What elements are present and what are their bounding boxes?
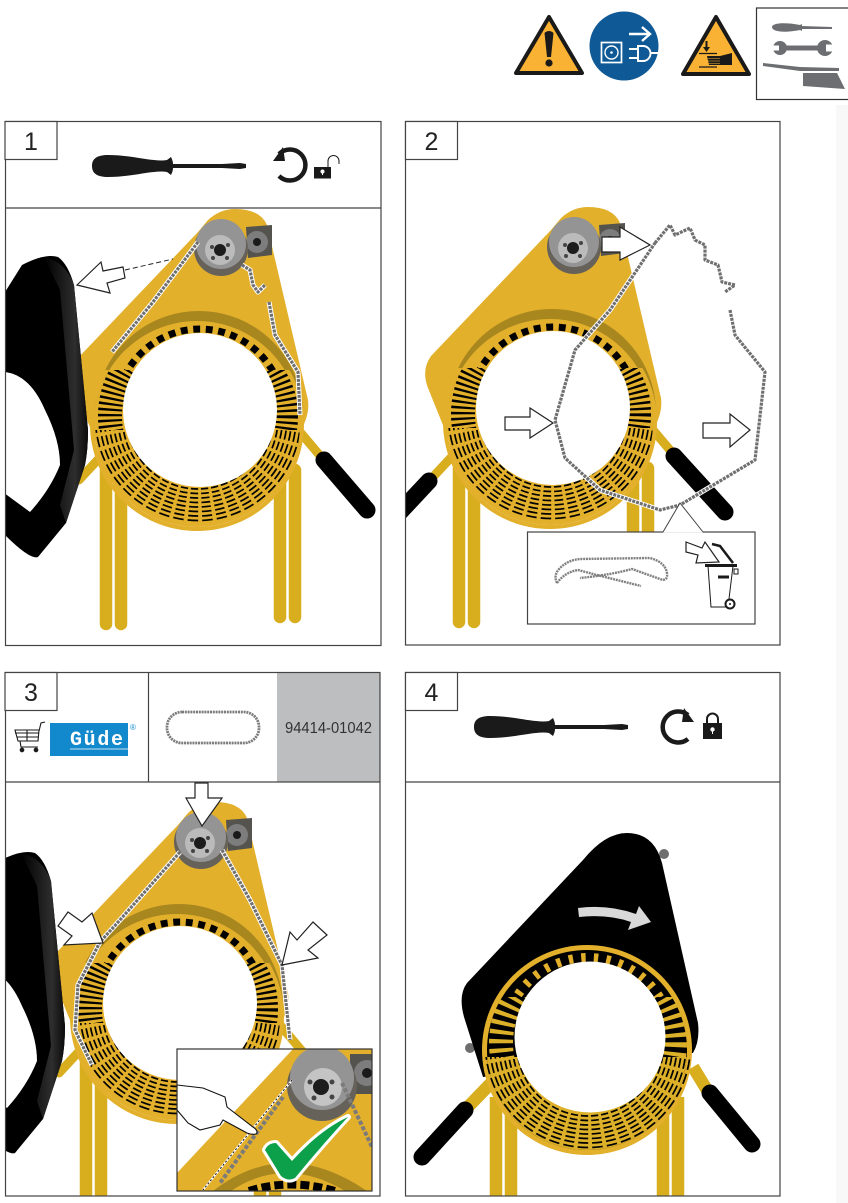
new chain	[75, 850, 290, 1065]
logo: Güde	[50, 723, 136, 756]
step number 3: 3	[24, 679, 38, 707]
inset drum arc	[213, 1163, 367, 1191]
arrow: into bin	[686, 542, 719, 563]
closed machine	[422, 833, 752, 1203]
icon: crush hazard triangle	[683, 17, 749, 74]
step number 4	[406, 672, 458, 710]
arrow: chain on left	[58, 912, 103, 945]
removed side cover	[0, 256, 88, 557]
header dividers	[6, 673, 380, 782]
part number: 94414-01042	[285, 720, 372, 737]
icon: shopping cart	[15, 722, 45, 752]
icon: screwdriver	[92, 155, 246, 177]
step number 4: 4	[425, 679, 439, 707]
side strip	[836, 105, 848, 1203]
arrow: chain on sprocket	[186, 783, 222, 826]
panel frame	[406, 122, 780, 645]
panel frame	[406, 672, 780, 1196]
inset green check mark	[265, 1117, 348, 1180]
black cover plate	[462, 833, 698, 1077]
step number 3	[5, 672, 57, 710]
inset pulley	[287, 1069, 357, 1121]
machine with old chain pulled away	[385, 207, 725, 622]
new chain loop	[167, 712, 259, 743]
icon: closed padlock	[703, 714, 722, 739]
drum	[482, 942, 692, 1155]
inset chain	[220, 1083, 372, 1183]
old chain loop	[555, 225, 765, 510]
dashed leader line	[125, 259, 173, 270]
legs and handle arms	[465, 1067, 707, 1203]
arrow: pull right	[703, 414, 750, 447]
icon: counter-clockwise rotation	[273, 147, 305, 180]
chain segments	[112, 242, 300, 415]
icon: general warning triangle	[516, 17, 582, 73]
panel: step 2	[385, 122, 780, 645]
handles	[385, 456, 725, 528]
arrow: pull left	[505, 408, 553, 438]
handles	[422, 1093, 752, 1157]
arrow: rotate cover	[578, 906, 651, 930]
arrow: chain on right	[282, 922, 327, 965]
inset gearbox	[350, 1054, 372, 1094]
machine with new chain	[0, 802, 302, 1203]
step number 2: 2	[425, 128, 438, 156]
step number 1	[5, 122, 57, 160]
inset dotted line	[203, 1080, 292, 1190]
icon: grey wrench	[770, 40, 836, 56]
panel: step 3	[0, 672, 380, 1203]
icon: clockwise rotation	[663, 708, 694, 742]
icon: grey brush	[763, 63, 845, 89]
arrow: cover removal	[77, 262, 125, 293]
part number field	[277, 673, 380, 782]
inset pointing hand	[177, 1085, 257, 1134]
header divider	[6, 207, 381, 209]
icon: screwdriver	[474, 716, 628, 738]
arrow: chain off sprocket	[602, 227, 650, 260]
icon: tools box	[756, 8, 848, 100]
header divider	[406, 781, 780, 783]
panel: step 1	[0, 122, 381, 646]
logo: Güde: Güde	[70, 729, 123, 752]
machine with chain being removed	[0, 209, 367, 624]
removed side cover	[0, 852, 65, 1153]
panel: step 4	[406, 672, 780, 1203]
logo: Güde: ®	[130, 723, 136, 732]
panel frame	[6, 672, 380, 1196]
panel frame	[6, 122, 381, 646]
icon: grey screwdriver	[772, 23, 832, 32]
right handle	[324, 460, 367, 510]
old chain sketch	[556, 558, 667, 586]
icon: disconnect plug mandatory sign	[590, 12, 659, 80]
icon: open padlock	[314, 156, 339, 178]
inset: chain tension check	[177, 1046, 380, 1191]
icon: waste bin	[705, 544, 738, 608]
step number 2	[406, 122, 458, 160]
callout: dispose of old chain	[528, 503, 755, 624]
bolts	[659, 849, 669, 859]
step number 1: 1	[24, 128, 38, 156]
